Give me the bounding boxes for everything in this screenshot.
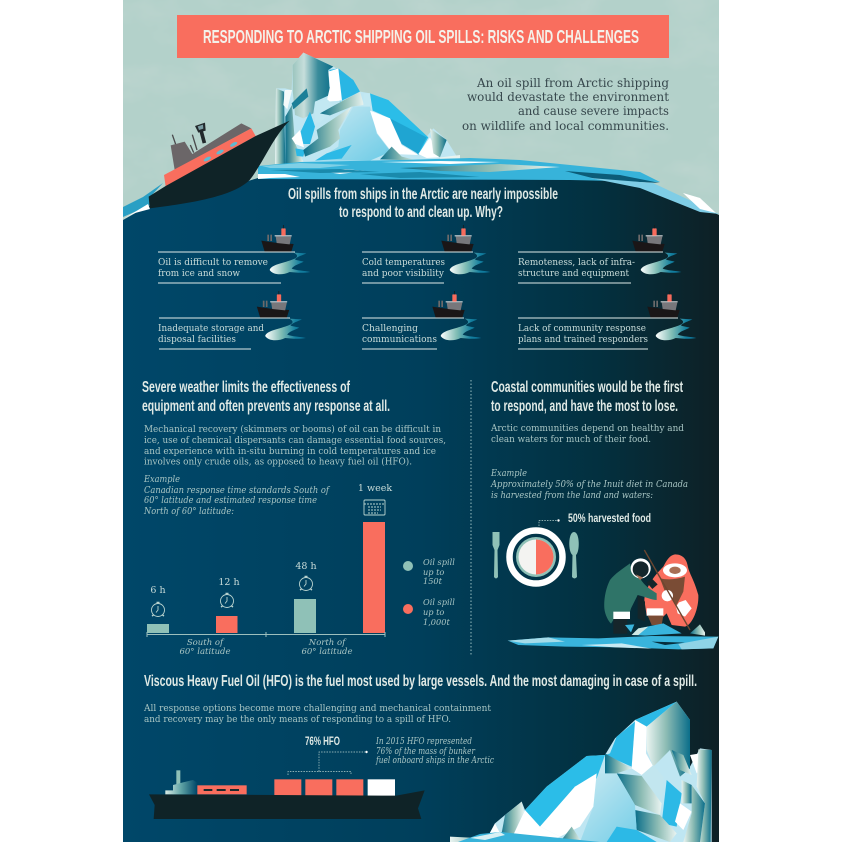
text: response options: and recovery may be the only means of responding to a spill of HFO. <box>144 714 451 725</box>
reason: remoteness: Remoteness, lack of infra- <box>518 257 635 268</box>
icon: plate chart <box>510 530 562 584</box>
icon: top iceberg <box>275 53 460 164</box>
text: diet example: is harvested from the land and waters: <box>491 490 653 501</box>
icon: fork <box>492 532 500 578</box>
title banner <box>177 15 669 58</box>
intro text: and cause severe impacts <box>518 104 669 118</box>
reason: communications: Challenging <box>362 323 418 334</box>
legend: up to <box>423 567 444 577</box>
reason: community plans: plans and trained responders <box>518 334 648 345</box>
text: arctic communities: Arctic communities depend on healthy and <box>490 423 684 434</box>
reason: cold <box>362 225 490 283</box>
legend: Oil spill <box>423 557 455 567</box>
reason: oil on ice: Oil is difficult to remove <box>158 257 268 268</box>
illustration: tanker ship <box>149 770 425 819</box>
intro text <box>462 76 669 133</box>
text: 2015 HFO note <box>375 737 494 766</box>
heading: why: Oil spills from ships in the Arctic are nearly impossible <box>288 186 558 203</box>
intro text: on wildlife and local communities. <box>462 119 669 133</box>
heading: coastal communities: to respond, and have the most to lose. <box>491 398 678 415</box>
legend <box>403 557 455 627</box>
text: response options <box>143 703 491 725</box>
callout: 76% HFO <box>288 736 368 775</box>
bottom ice waves <box>458 832 600 842</box>
reason: remoteness <box>518 225 681 283</box>
text: chart example: North of 60° latitude: <box>143 506 234 517</box>
text: mechanical recovery: ice, use of chemical dispersants can damage essential food sources, <box>144 435 446 446</box>
left wave <box>123 183 163 219</box>
reason: oil on ice: from ice and snow <box>158 268 240 279</box>
heading: severe weather <box>142 379 390 415</box>
heading: severe weather: equipment and often prevents any response at all. <box>142 398 390 415</box>
text: chart example: 60° latitude and estimated response time <box>144 495 317 506</box>
heading: severe weather: Severe weather limits the effectiveness of <box>142 379 351 396</box>
callout: 50% harvested food: 50% harvested food <box>568 513 651 525</box>
text: mechanical recovery: involves only crude oils, as opposed to heavy fuel oil (HFO). <box>144 456 412 468</box>
illustration: two hunters on ice <box>604 550 705 636</box>
intro text: An oil spill from Arctic shipping <box>476 76 669 90</box>
text: diet example <box>490 468 688 501</box>
sea background <box>123 177 719 842</box>
text: 2015 HFO note: fuel onboard ships in the Arctic <box>375 756 494 766</box>
text: chart example: Canadian response time standards South of <box>144 485 330 496</box>
bar chart: response time: 1 week <box>358 483 392 494</box>
bar chart: response time: North of <box>308 638 347 648</box>
text: diet example: Approximately 50% of the Inuit diet in Canada <box>490 479 688 490</box>
text: mechanical recovery: Mechanical recovery (skimmers or booms) of oil can be difficult in <box>144 424 441 435</box>
legend: Oil spill <box>423 597 455 607</box>
text: diet example: Example <box>490 468 527 479</box>
icon: sinking ship <box>149 121 290 208</box>
text: 2015 HFO note: In 2015 HFO represented <box>375 737 472 747</box>
reason: oil on ice <box>158 225 310 283</box>
text: arctic communities <box>490 423 684 445</box>
legend: 1,000t <box>423 617 450 627</box>
reason: remoteness: structure and equipment <box>518 268 629 279</box>
reason: community plans <box>518 291 696 349</box>
bar chart: response time: 60° latitude <box>179 647 231 657</box>
reason: community plans: Lack of community response <box>518 323 646 334</box>
reason: storage: Inadequate storage and <box>158 323 264 334</box>
callout: 50% harvested food <box>539 513 651 526</box>
ice texture <box>123 0 719 225</box>
reason: communications: communications <box>362 334 437 345</box>
text: chart example: Example <box>143 474 180 485</box>
legend: 150t <box>423 576 443 586</box>
bar chart: response time: 12 h <box>218 577 240 588</box>
text: chart example <box>143 474 330 517</box>
reason: storage: disposal facilities <box>158 334 236 345</box>
heading: why: to respond to and clean up. Why? <box>339 204 503 221</box>
illustration: bottom iceberg <box>450 702 712 842</box>
reason: cold: and poor visibility <box>362 268 445 279</box>
bar chart: response time: South of <box>187 638 225 648</box>
reason: communications <box>362 291 481 349</box>
text: arctic communities: clean waters for much of their food. <box>491 434 651 445</box>
text: response options: All response options become more challenging and mechanical containment <box>143 703 491 714</box>
heading: coastal communities <box>491 379 683 415</box>
ice floe <box>508 636 718 649</box>
legend: up to <box>423 607 444 617</box>
icon: spoon <box>569 532 579 578</box>
bar chart: response time: 60° latitude <box>301 647 353 657</box>
text: mechanical recovery: and experience with in-situ burning in cold temperatures and ice <box>144 446 436 457</box>
text: 2015 HFO note: 76% of the mass of bunker <box>376 747 476 757</box>
bar chart: response time: 6 h <box>150 585 166 596</box>
reason: cold: Cold temperatures <box>362 257 445 268</box>
heading: coastal communities: Coastal communities would be the first <box>491 379 683 396</box>
text: mechanical recovery <box>144 424 446 468</box>
reason: storage <box>158 291 306 349</box>
top ice waves <box>258 158 719 214</box>
callout: 76% HFO: 76% HFO <box>305 736 340 748</box>
intro text: would devastate the environment <box>467 90 669 104</box>
heading: why <box>288 186 558 221</box>
bar chart: response time: 48 h <box>295 561 317 572</box>
poster background <box>123 0 719 842</box>
bar chart: response time <box>147 483 392 657</box>
